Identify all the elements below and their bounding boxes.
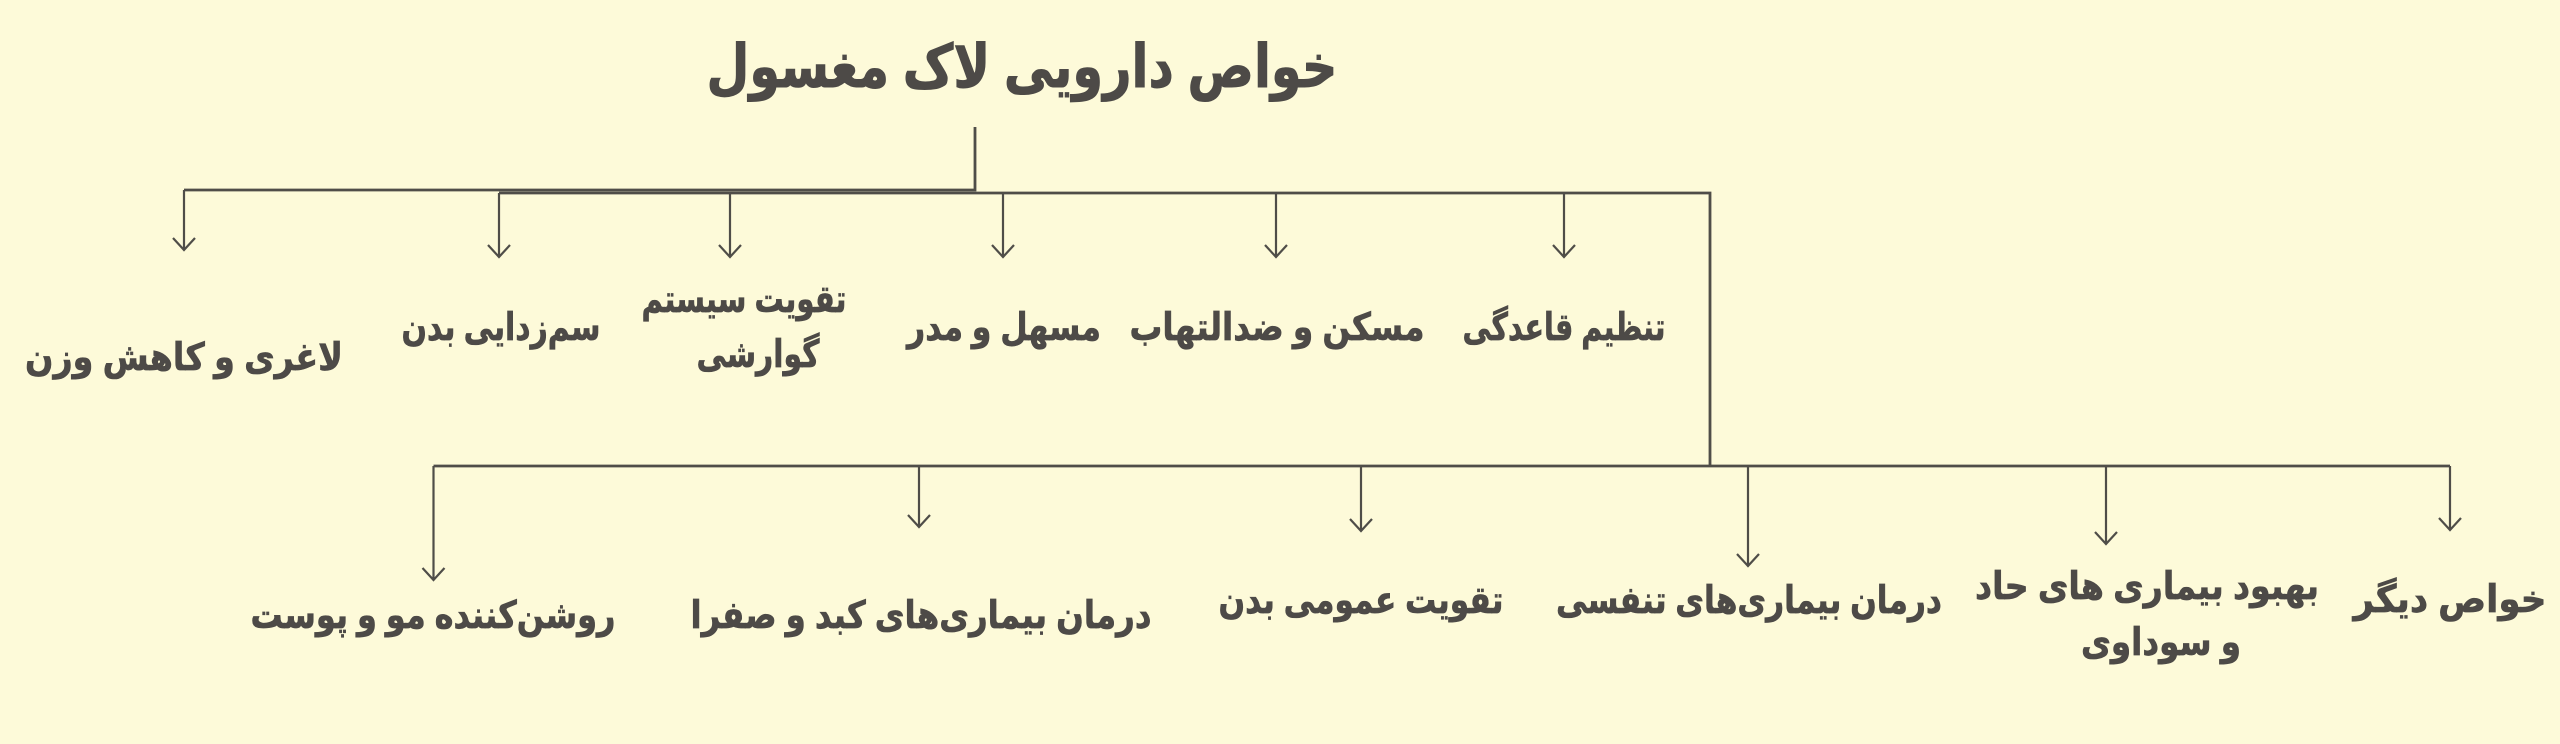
label: general tonic: تقویت عمومی بدن <box>1218 580 1504 622</box>
label: laxative and diuretic: مسهل و مدر <box>905 307 1101 350</box>
connector: main tree lines <box>184 127 2450 466</box>
arrow: hair and skin <box>422 466 444 580</box>
label: digestive system: تقویت سیستم <box>642 279 846 322</box>
label: acute and melancholic diseases: و سوداوی <box>2081 622 2241 665</box>
label: other properties: خواص دیگر <box>2352 577 2546 621</box>
arrow: menstrual regulation <box>1553 193 1575 257</box>
arrow: general tonic <box>1350 466 1372 531</box>
title: خواص دارویی لاک مغسول <box>706 33 1338 102</box>
arrow: respiratory <box>1737 466 1759 566</box>
label: menstrual regulation: تنظیم قاعدگی <box>1462 305 1666 350</box>
label: acute and melancholic diseases <box>1975 566 2319 665</box>
arrow: analgesic and anti-inflammatory <box>1265 193 1287 257</box>
label: digestive system <box>642 279 846 376</box>
label: hair and skin: روشن‌کننده مو و پوست <box>250 595 616 638</box>
arrow: weight loss <box>173 190 195 250</box>
arrow: acute and melancholic diseases <box>2095 466 2117 544</box>
arrow: laxative and diuretic <box>992 193 1014 257</box>
arrow: digestive system <box>719 193 741 257</box>
arrow: other properties <box>2439 466 2461 530</box>
label: acute and melancholic diseases: بهبود بیماری های حاد <box>1975 566 2319 608</box>
label: respiratory: درمان بیماری‌های تنفسی <box>1556 580 1942 622</box>
label: liver and bile: درمان بیماری‌های کبد و صفرا <box>690 595 1152 638</box>
label: digestive system: گوارشی <box>696 332 820 376</box>
arrow: liver and bile <box>908 466 930 527</box>
label: detoxification: سم‌زدایی بدن <box>402 307 600 350</box>
label: analgesic and anti-inflammatory: مسکن و ضدالتهاب <box>1130 307 1424 350</box>
arrow: detoxification <box>488 193 510 257</box>
label: weight loss: لاغری و کاهش وزن <box>25 337 343 380</box>
